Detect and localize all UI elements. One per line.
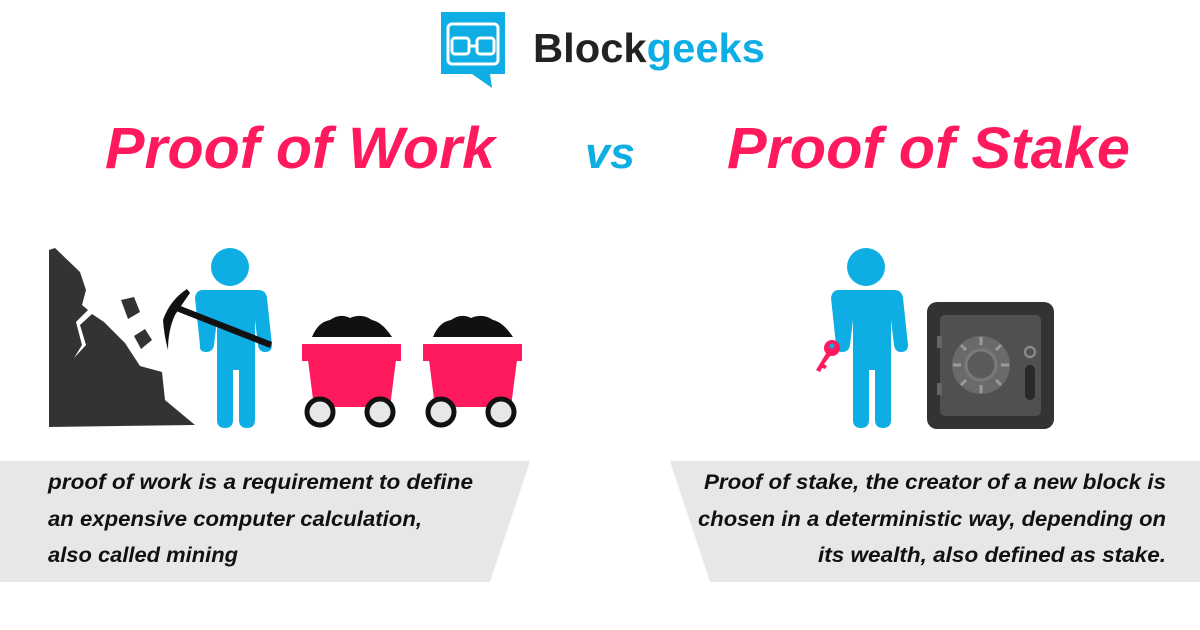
logo	[441, 12, 765, 88]
panel: proof of stake description	[670, 461, 1200, 582]
panel: proof of stake description: chosen in a deterministic way, depending on	[698, 508, 1166, 531]
icon: mine cart 2	[423, 316, 522, 425]
icon: miner with pickaxe	[163, 248, 272, 428]
panel: proof of stake description: Proof of stake, the creator of a new block is	[704, 471, 1166, 494]
vs: vs	[585, 129, 635, 178]
icon: rock cliff	[49, 248, 195, 427]
panel: proof of work description	[0, 461, 530, 582]
title: proof of stake: Proof of Stake	[727, 116, 1130, 181]
panel: proof of work description: also called mining	[48, 544, 238, 567]
title: proof of work: Proof of Work	[105, 116, 498, 181]
icon: person with key	[816, 248, 908, 428]
icon: mine cart 1	[302, 316, 401, 425]
panel: proof of work description: proof of work is a requirement to define	[47, 471, 473, 494]
icon: safe	[927, 302, 1054, 429]
panel: proof of stake description: its wealth, also defined as stake.	[818, 544, 1166, 567]
logo text: Blockgeeks	[533, 25, 765, 71]
panel: proof of work description: an expensive computer calculation,	[48, 508, 422, 531]
icon: key	[816, 340, 840, 372]
icon: blockgeeks chat bubble	[441, 12, 505, 88]
